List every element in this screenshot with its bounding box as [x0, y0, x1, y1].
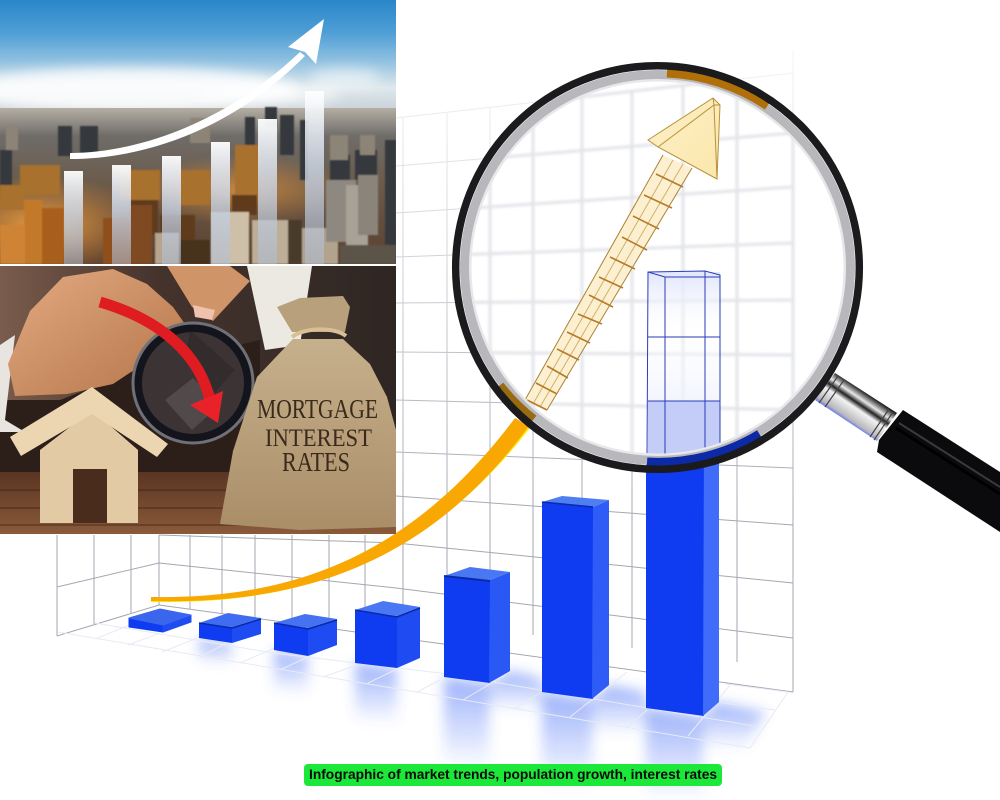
bar 6 [542, 496, 609, 699]
table [0, 472, 396, 534]
near buildings [0, 175, 396, 264]
magnified arrow shaft [525, 155, 692, 410]
handle [815, 373, 1000, 532]
sack label: MORTGAGE [257, 394, 378, 424]
photo: city skyline with rising bars [0, 0, 396, 275]
bar 5 [444, 567, 510, 683]
magnifying glass [452, 62, 1000, 532]
bar 7 [646, 440, 719, 716]
glass bars [64, 91, 324, 264]
ferrule [815, 373, 897, 441]
magnified glass bar [646, 271, 721, 474]
clouds [0, 68, 380, 112]
skyline [0, 107, 396, 275]
bar 3 [274, 614, 337, 656]
caption [304, 764, 722, 786]
sack label: RATES [282, 447, 350, 477]
bar reflections [199, 638, 765, 800]
floor grid [58, 623, 788, 748]
lens rim [456, 66, 859, 469]
bar 1 [129, 609, 191, 632]
sack label: INTEREST [265, 425, 372, 452]
bar 2 [199, 613, 261, 643]
caption: Infographic of market trends, population growth, interest rates [309, 767, 717, 782]
black grip [877, 410, 1000, 532]
photo: mortgage interest rates [0, 266, 396, 534]
magnified grid [460, 84, 795, 464]
wooden house [10, 387, 168, 523]
rim colour accents [667, 72, 768, 105]
magnified arrow head [648, 98, 720, 179]
bar chart [129, 440, 719, 716]
red arrow [100, 302, 223, 423]
small magnifier [133, 323, 253, 443]
burlap sack [220, 296, 396, 530]
sack label [258, 400, 377, 472]
suit and shirt [0, 266, 312, 472]
white rising arrow [70, 19, 324, 159]
lens interior [458, 68, 856, 466]
orange trend curve [151, 418, 533, 602]
bar 4 [355, 601, 420, 668]
chart grid [57, 50, 793, 692]
hand [0, 266, 250, 432]
